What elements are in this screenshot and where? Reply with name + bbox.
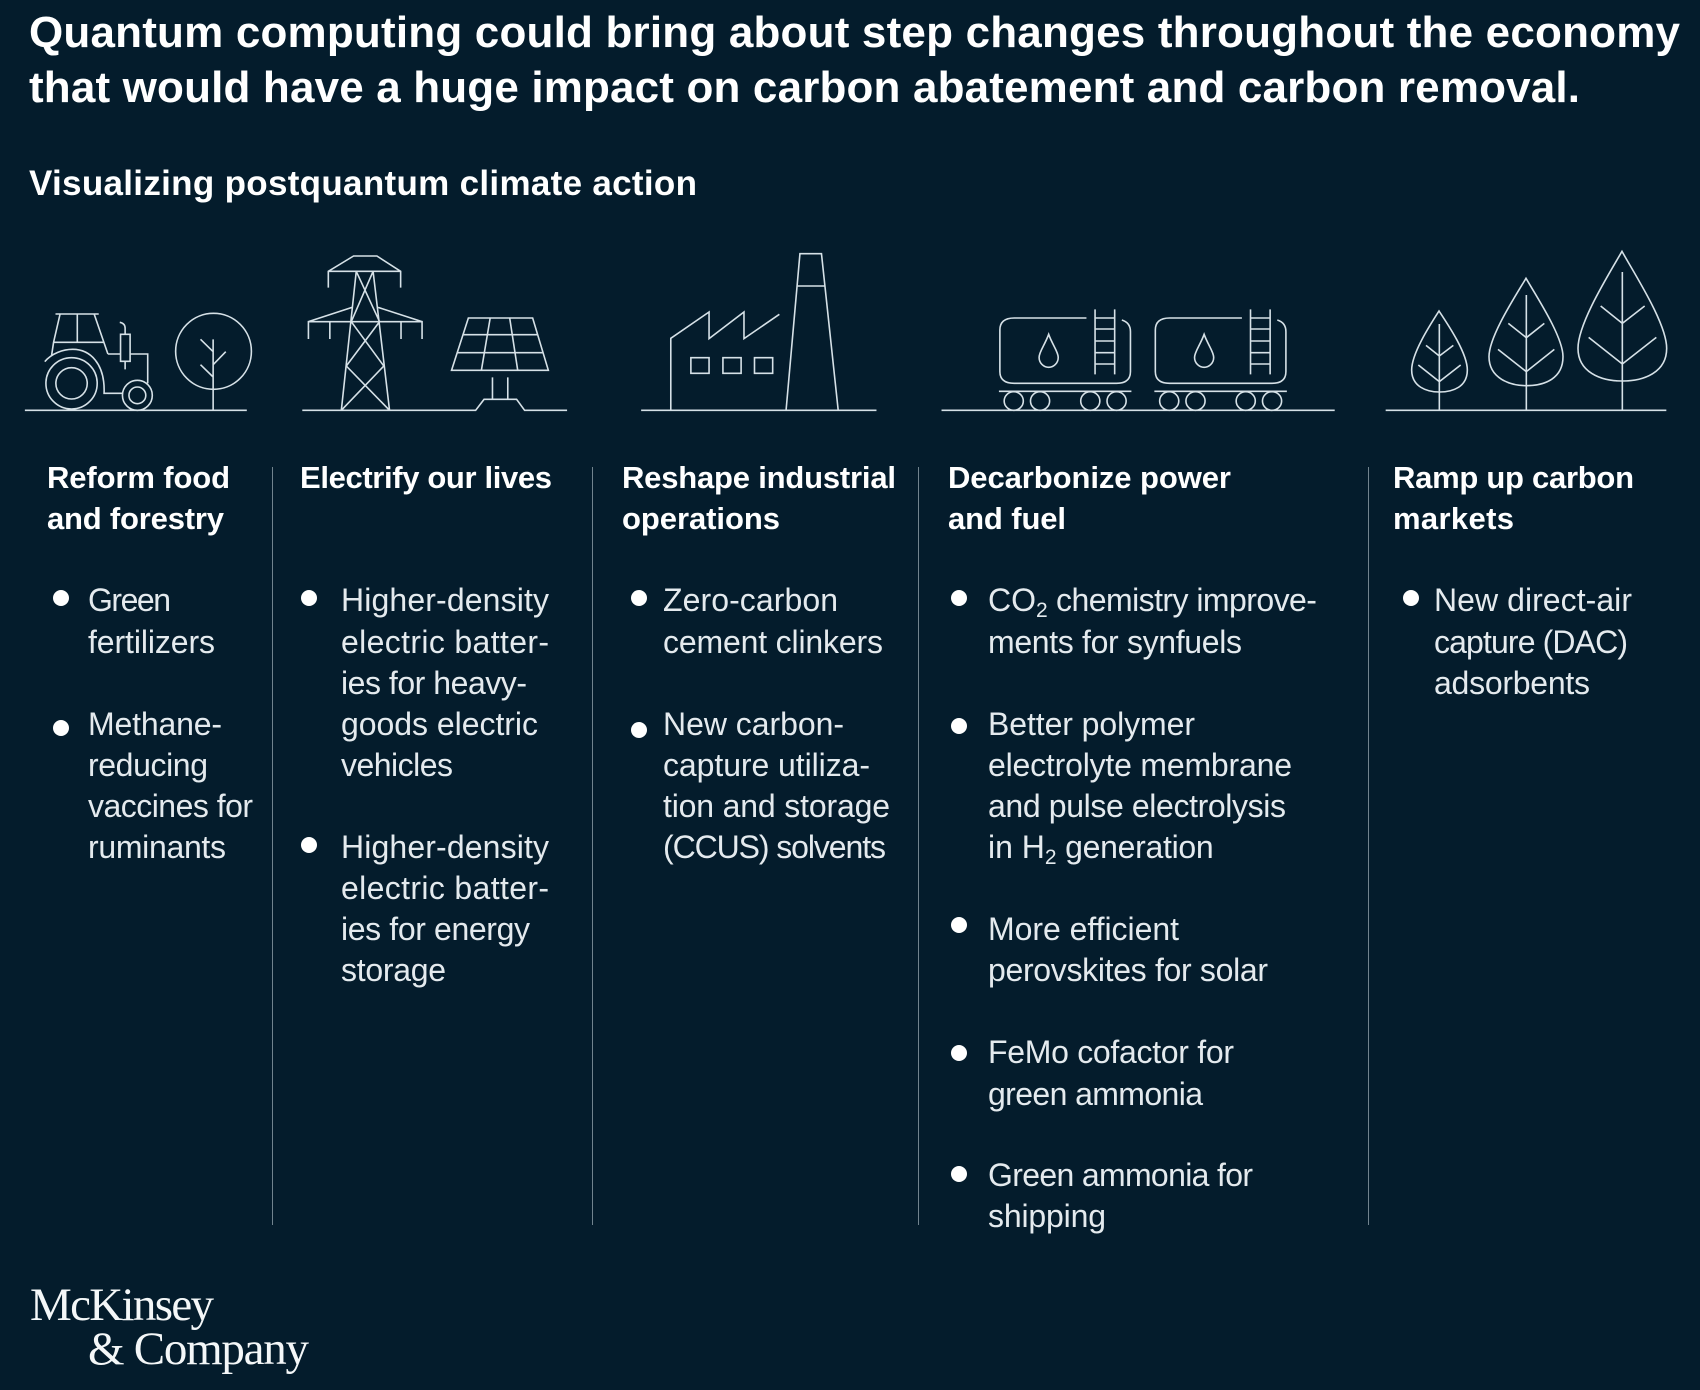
bullet: batteries for energy storage: storage [341, 952, 446, 988]
logo: McKinsey & Company: McKinsey [30, 1279, 214, 1331]
bullet: zero-carbon clinkers: cement clinkers [663, 624, 883, 660]
panel: ramp up carbon markets [1393, 460, 1634, 701]
bullet: green ammonia shipping [951, 1157, 1253, 1234]
bullet: batteries for electric vehicles: ies for heavy- [341, 665, 527, 701]
bullet: batteries for electric vehicles: Higher-density [341, 582, 549, 618]
bullet: FeMo cofactor [951, 1034, 1234, 1112]
heading: reshape industrial operations: Reshape industrial [622, 460, 896, 495]
bullet: batteries for energy storage: electric batter- [341, 870, 549, 906]
bullet: FeMo cofactor: green ammonia [988, 1076, 1203, 1112]
bullet: methane-reducing vaccines: vaccines for [88, 788, 253, 824]
bullet: batteries for electric vehicles: goods electric [341, 706, 538, 742]
logo: McKinsey & Company: & Company [88, 1323, 310, 1375]
bullet: green fertilizers [53, 582, 215, 660]
bullet: zero-carbon clinkers: Zero-carbon [663, 582, 838, 618]
bullet: polymer electrolyte membrane: generation [1057, 829, 1213, 865]
heading: decarbonize power and fuel [948, 460, 1231, 536]
bullet: DAC adsorbents [1403, 582, 1632, 701]
bullet: green fertilizers: fertilizers [88, 624, 215, 660]
bullet: green ammonia shipping: Green ammonia for [988, 1157, 1253, 1193]
bullet: FeMo cofactor: FeMo cofactor for [988, 1034, 1234, 1070]
panel: electrify our lives [300, 460, 552, 988]
title [29, 8, 1681, 112]
icon: tractor and tree [25, 313, 251, 410]
bullet: CCUS solvents [631, 706, 890, 865]
bullet: DAC adsorbents: capture (DAC) [1434, 624, 1628, 660]
icon: pylon and solar panel [302, 256, 567, 410]
heading: ramp up carbon markets: Ramp up carbon [1393, 460, 1634, 495]
title: Quantum computing could bring about step changes throughout the economy [29, 8, 1681, 57]
bullet: polymer electrolyte membrane: electrolyte membrane [988, 747, 1292, 783]
icon: three trees [1386, 251, 1667, 410]
bullet: green fertilizers: Green [88, 582, 171, 618]
bullet: DAC adsorbents: New direct-air [1434, 582, 1632, 618]
logo: McKinsey & Company [30, 1279, 310, 1375]
panel: reshape industrial operations [622, 460, 896, 865]
bullet: CO2 chemistry: ments for synfuels [988, 624, 1242, 660]
bullet: green ammonia shipping: shipping [988, 1198, 1106, 1234]
heading: ramp up carbon markets [1393, 460, 1634, 536]
bullet: CO2 chemistry: 2 [1036, 599, 1048, 622]
bullet: methane-reducing vaccines: reducing [88, 747, 208, 783]
bullet: batteries for electric vehicles [301, 582, 549, 783]
bullet: perovskites: perovskites for solar [988, 952, 1268, 988]
bullet: polymer electrolyte membrane: 2 [1045, 846, 1057, 869]
panel: reform food and forestry [47, 460, 253, 865]
heading: reform food and forestry: Reform food [47, 460, 230, 495]
subtitle: Visualizing postquantum climate action [29, 164, 697, 203]
title: that would have a huge impact on carbon abatement and carbon removal. [29, 63, 1580, 112]
icon: tanker wagons [942, 309, 1335, 410]
bullet: batteries for energy storage: Higher-density [341, 829, 549, 865]
heading: reform food and forestry: and forestry [47, 501, 225, 536]
bullet: perovskites [951, 911, 1268, 988]
bullet: polymer electrolyte membrane: and pulse electrolysis [988, 788, 1286, 824]
bullet: CCUS solvents: tion and storage [663, 788, 890, 824]
heading: reshape industrial operations: operations [622, 501, 780, 536]
heading: reshape industrial operations [622, 460, 896, 536]
bullet: CCUS solvents: New carbon- [663, 706, 844, 742]
bullet: batteries for energy storage: ies for energy [341, 911, 530, 947]
bullet: CO2 chemistry: CO [988, 582, 1036, 618]
bullet: CCUS solvents: (CCUS) solvents [663, 829, 886, 865]
bullet: batteries for electric vehicles: electric batter- [341, 624, 549, 660]
bullet: polymer electrolyte membrane [951, 706, 1292, 869]
bullet: methane-reducing vaccines: Methane- [88, 706, 222, 742]
bullet: DAC adsorbents: adsorbents [1434, 665, 1590, 701]
bullet: batteries for energy storage [301, 829, 549, 988]
bullet: methane-reducing vaccines [53, 706, 253, 865]
heading: reform food and forestry [47, 460, 230, 536]
heading: ramp up carbon markets: markets [1393, 501, 1514, 536]
bullet: CO2 chemistry [951, 582, 1316, 660]
bullet: perovskites: More efficient [988, 911, 1179, 947]
bullet: batteries for electric vehicles: vehicles [341, 747, 453, 783]
dividers [272, 467, 1368, 1225]
icon: factory [641, 254, 876, 410]
heading: electrify our lives: Electrify our lives [300, 460, 552, 495]
bullet: polymer electrolyte membrane: in H [988, 829, 1045, 865]
heading: decarbonize power and fuel: Decarbonize power [948, 460, 1231, 495]
bullet: zero-carbon clinkers [631, 582, 883, 660]
bullet: polymer electrolyte membrane: Better polymer [988, 706, 1195, 742]
panel: decarbonize power and fuel [948, 460, 1316, 1234]
bullet: methane-reducing vaccines: ruminants [88, 829, 226, 865]
heading: decarbonize power and fuel: and fuel [948, 501, 1066, 536]
bullet: CCUS solvents: capture utiliza- [663, 747, 870, 783]
bullet: CO2 chemistry: chemistry improve- [1048, 582, 1316, 618]
